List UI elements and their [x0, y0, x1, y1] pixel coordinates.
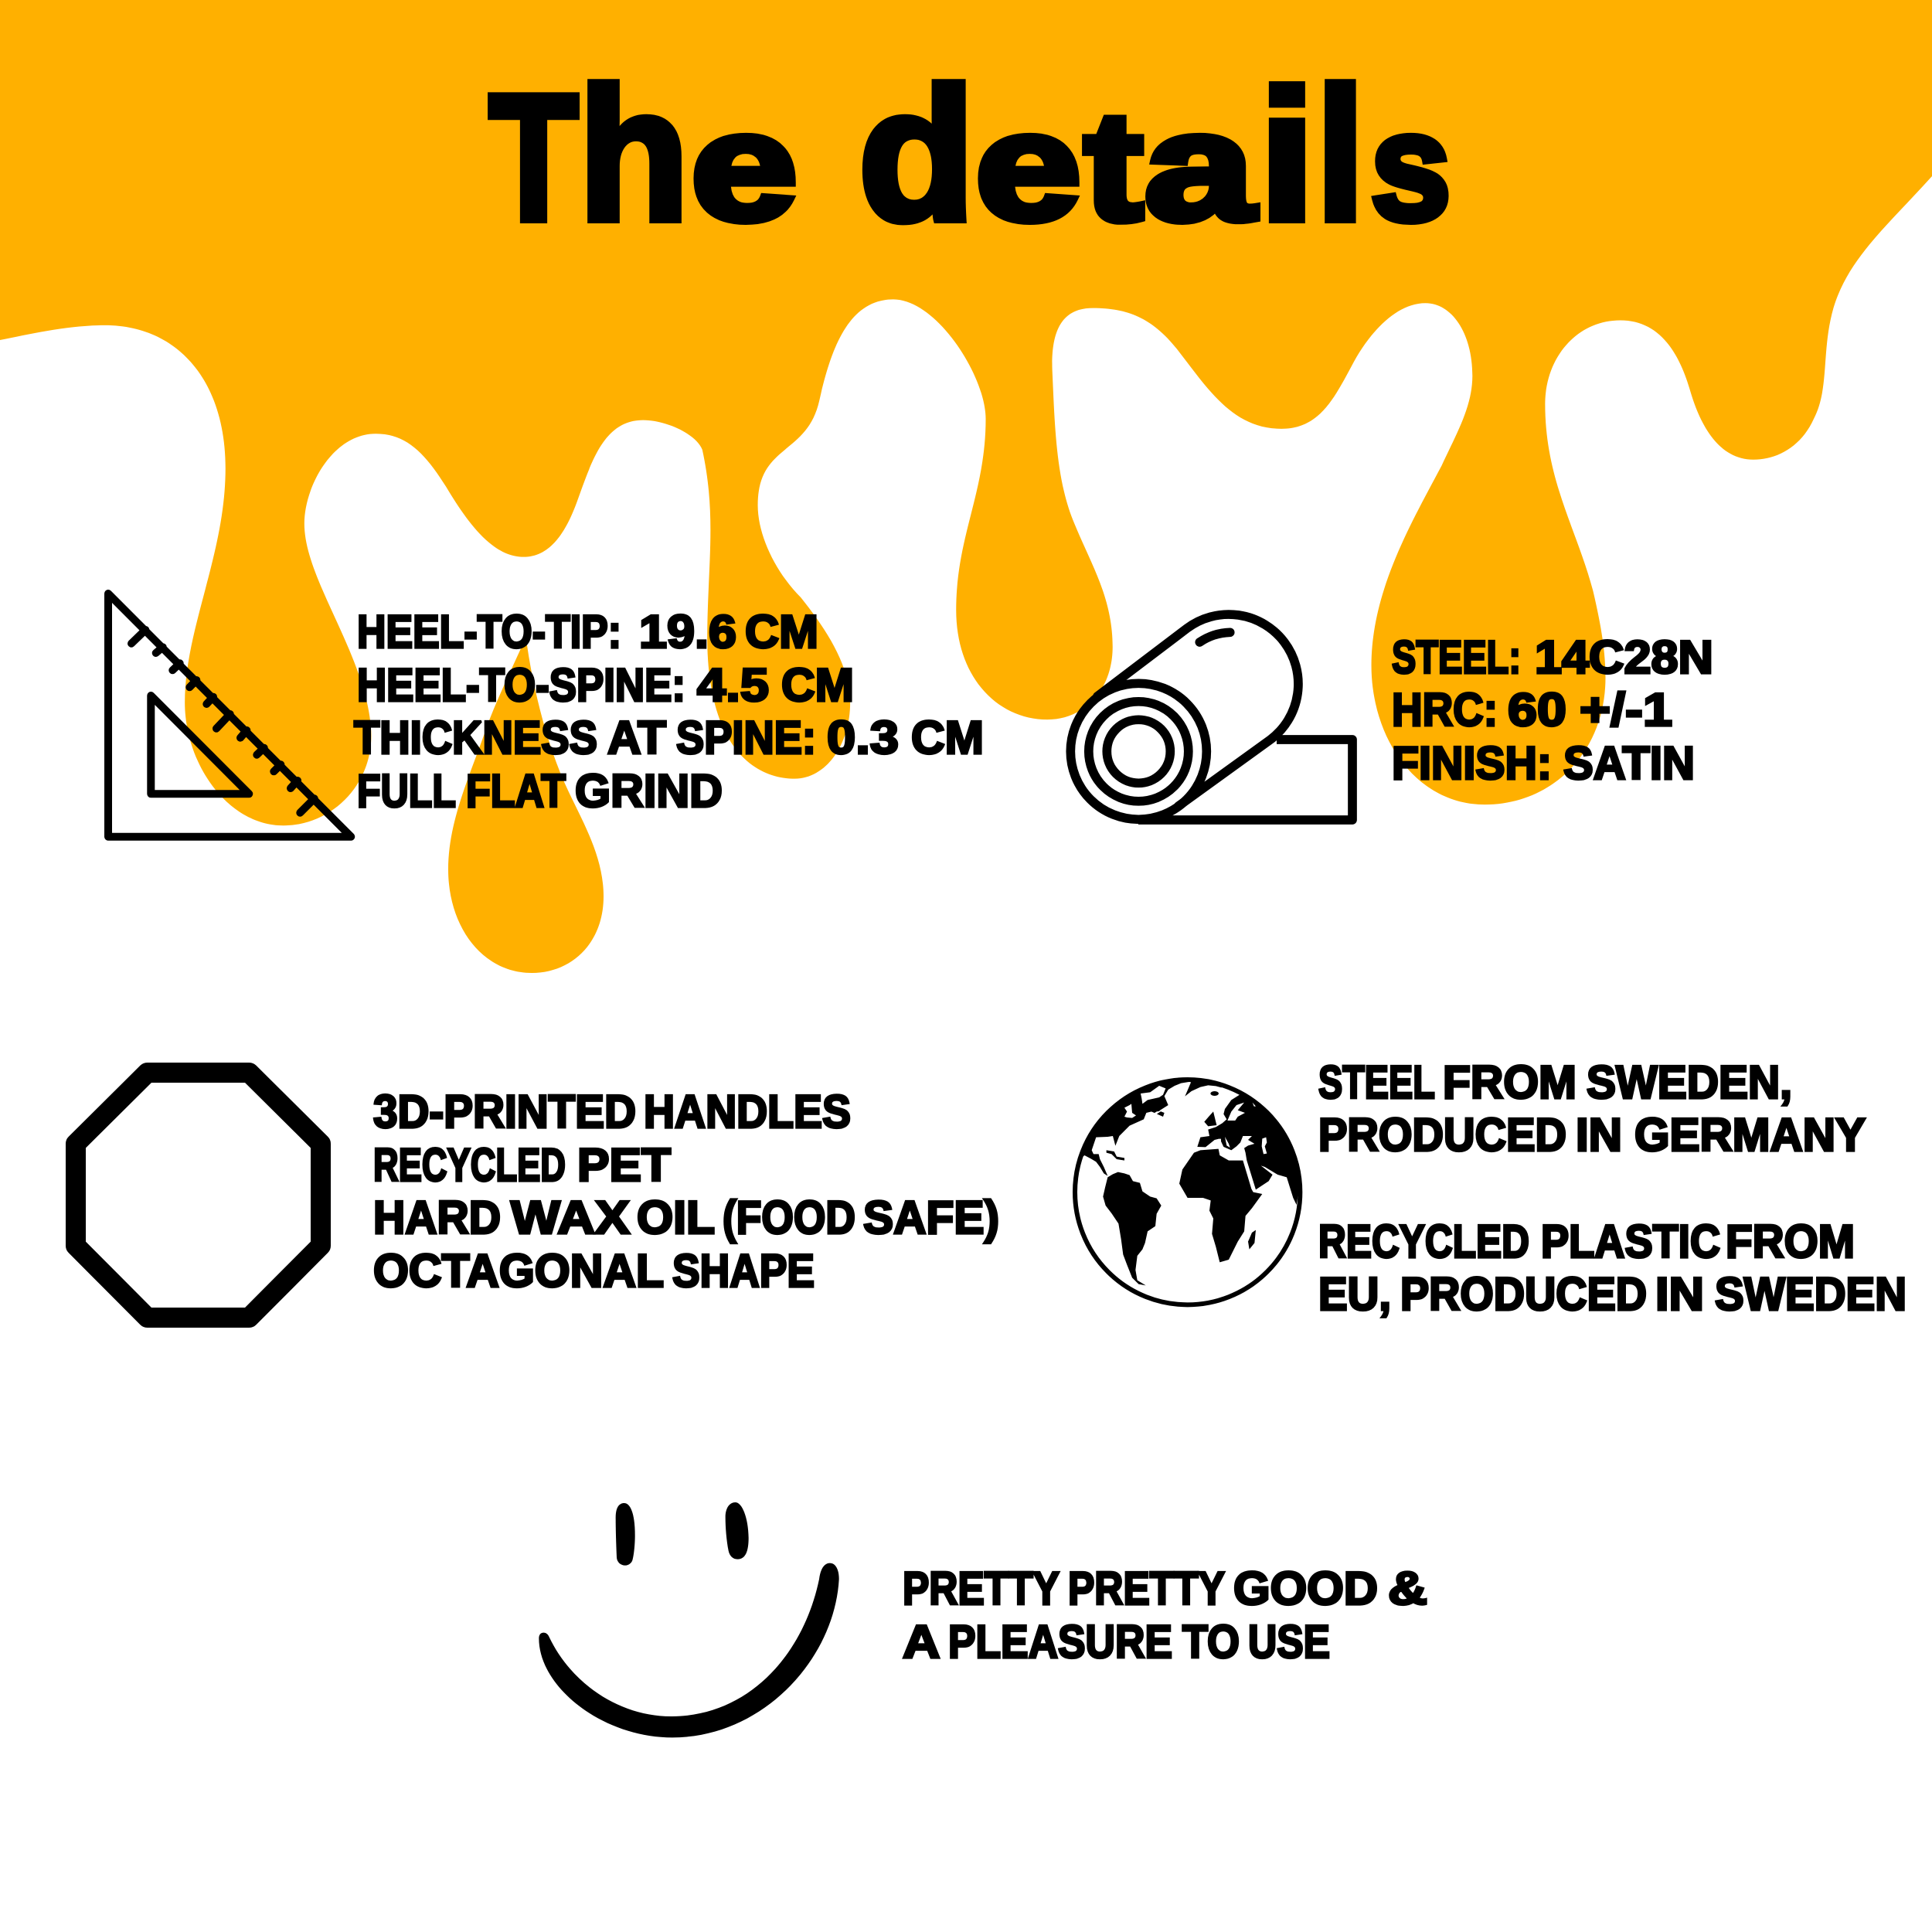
- text: origin details: GERMANY: [1634, 1109, 1866, 1161]
- text: handle details: OCTAGONAL: [373, 1245, 663, 1297]
- title: t: [1084, 80, 1143, 253]
- text: blade dimensions: HEEL-TO-SPINE:: [357, 659, 685, 711]
- text: handle details: 3D-PRINTED: [373, 1086, 636, 1138]
- dripping honey background: [0, 0, 1932, 973]
- text: handle details: WAX: [511, 1192, 630, 1243]
- title: a: [1145, 81, 1256, 253]
- text: steel details: 14C28N: [1535, 631, 1713, 683]
- text: blade dimensions: [354, 606, 984, 817]
- text: closing remark: A: [903, 1616, 939, 1668]
- text: steel details: FINISH:: [1392, 737, 1552, 789]
- text: closing remark: [903, 1563, 1427, 1668]
- text: origin details: PRODUCED: [1318, 1109, 1566, 1161]
- text: steel details: SATIN: [1563, 737, 1695, 789]
- text: origin details: [1318, 1056, 1906, 1320]
- text: origin details: FROM: [1443, 1056, 1577, 1108]
- text: closing remark: PRETTY: [903, 1563, 1060, 1614]
- text: blade dimensions: CM: [781, 659, 854, 711]
- title: h: [579, 49, 689, 260]
- text: closing remark: PRETTY: [1068, 1563, 1225, 1614]
- title: i: [1259, 52, 1315, 259]
- icon: globe: [1075, 1080, 1300, 1304]
- title: l: [1316, 49, 1365, 260]
- text: handle details: PET: [577, 1139, 671, 1191]
- text: handle details: (FOOD: [723, 1192, 855, 1243]
- text: origin details: PRODUCED: [1400, 1268, 1647, 1320]
- text: steel details: 60: [1508, 684, 1566, 736]
- text: closing remark: USE: [1248, 1616, 1330, 1668]
- text: blade dimensions: GRIND: [575, 765, 723, 817]
- text: origin details: SWEDEN,: [1587, 1056, 1792, 1108]
- text: closing remark: TO: [1182, 1616, 1240, 1668]
- text: origin details: IN: [1655, 1268, 1704, 1320]
- icon: octagon: [76, 1073, 321, 1318]
- text: closing remark: GOOD: [1233, 1563, 1378, 1614]
- text: origin details: EU,: [1318, 1268, 1391, 1320]
- text: handle details: OIL: [637, 1192, 714, 1243]
- text: steel details: +/-1: [1580, 684, 1672, 736]
- text: blade dimensions: FULL: [357, 765, 455, 817]
- text: blade dimensions: CM: [745, 606, 818, 658]
- title: d: [859, 49, 975, 260]
- text: blade dimensions: HEEL-TO-TIP:: [357, 606, 621, 658]
- text: blade dimensions: THICKNESS: [354, 712, 597, 764]
- text: handle details: HANDLES: [644, 1086, 851, 1138]
- text: origin details: FROM: [1726, 1216, 1855, 1267]
- text: handle details: HARD: [373, 1192, 501, 1243]
- text: handle details: [373, 1086, 999, 1297]
- text: blade dimensions: CM: [911, 712, 984, 764]
- text: blade dimensions: 19.6: [639, 606, 736, 658]
- icon: smiley face: [539, 1502, 839, 1737]
- text: origin details: STEEL: [1318, 1056, 1434, 1108]
- text: origin details: SWEDEN: [1715, 1268, 1906, 1320]
- text: handle details: RECYCLED: [373, 1139, 566, 1191]
- text: steel details: STEEL:: [1392, 631, 1521, 683]
- text: blade dimensions: 4.5: [697, 659, 769, 711]
- title: e: [691, 81, 798, 253]
- text: steel details: HRC:: [1392, 684, 1498, 736]
- text: handle details: SAFE): [863, 1192, 999, 1243]
- text: handle details: SHAPE: [672, 1245, 815, 1297]
- text: closing remark: PLEASURE: [948, 1616, 1172, 1668]
- text: blade dimensions: AT: [607, 712, 666, 764]
- text: steel details: [1392, 631, 1713, 789]
- text: origin details: PLASTIC: [1541, 1216, 1720, 1267]
- text: blade dimensions: SPINE:: [676, 712, 816, 764]
- title: e: [975, 81, 1081, 253]
- title: T: [489, 58, 578, 258]
- text: origin details: IN: [1576, 1109, 1622, 1161]
- icon: steel roll: [1070, 614, 1352, 820]
- title: s: [1371, 81, 1451, 253]
- icon: set square: [108, 594, 351, 837]
- text: origin details: RECYCLED: [1318, 1216, 1529, 1267]
- text: closing remark: &: [1388, 1563, 1427, 1614]
- text: blade dimensions: FLAT: [466, 765, 566, 817]
- text: blade dimensions: 0.3: [827, 712, 899, 764]
